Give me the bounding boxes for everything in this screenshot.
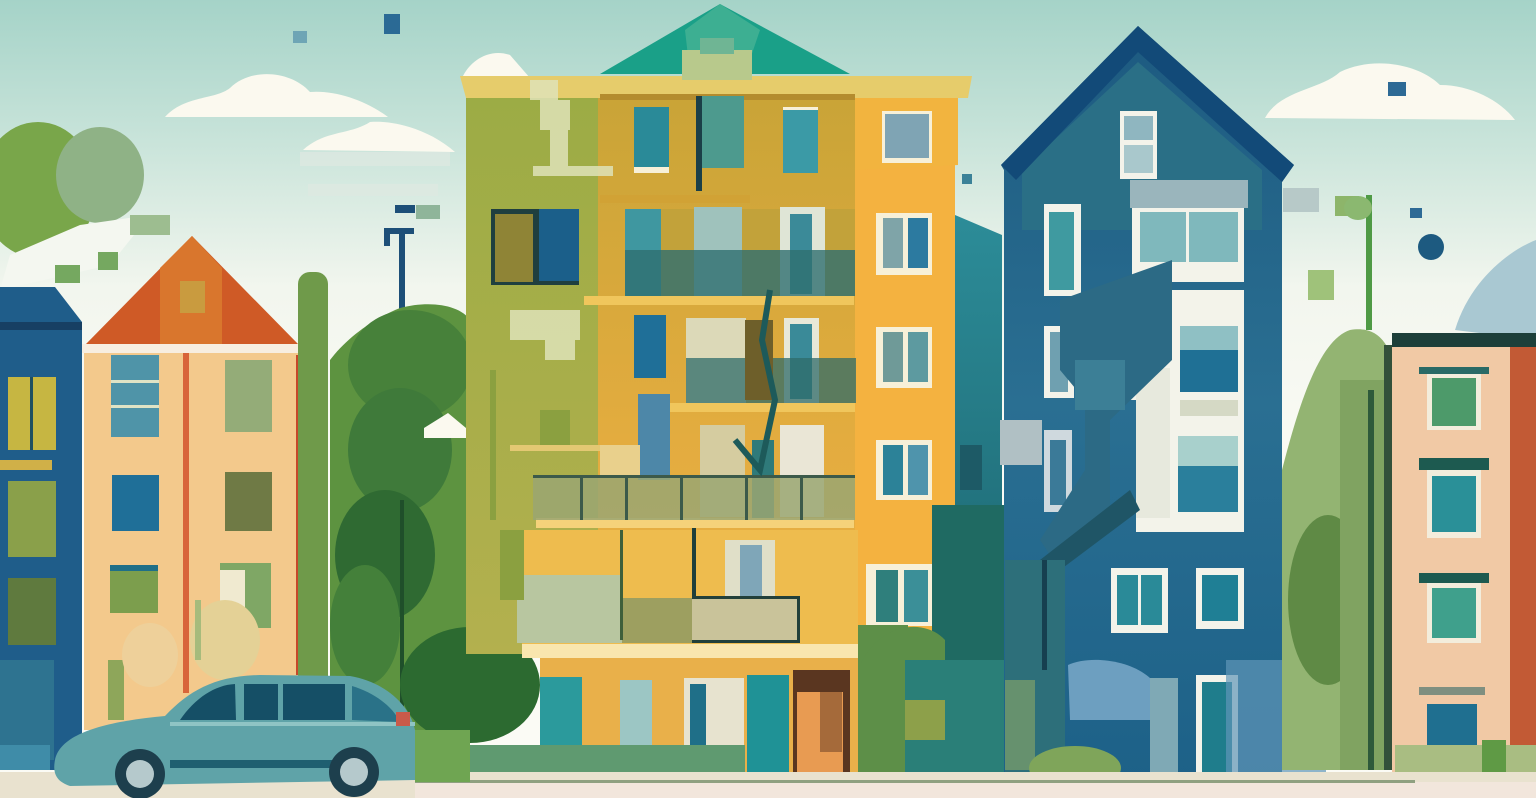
green roof ornament [682, 50, 752, 80]
ivy on olive wing [510, 80, 613, 360]
car wheels [115, 747, 379, 798]
faded cloud bands [300, 152, 450, 196]
central apartment [460, 38, 972, 784]
ground floor [540, 658, 860, 780]
right pink building [1392, 333, 1536, 785]
house yard plants [108, 600, 260, 720]
central trees [298, 272, 540, 743]
central apartment: roof peak [600, 4, 850, 74]
right bright wing [855, 165, 955, 635]
right wing windows [866, 213, 932, 626]
ledges [600, 195, 750, 203]
lower windows [1111, 568, 1168, 633]
left blue building [0, 287, 82, 770]
white mid block [1124, 290, 1244, 532]
roof slab [460, 76, 972, 98]
yellow core [598, 94, 858, 784]
house windows [111, 355, 159, 437]
floor 4 windows [638, 394, 670, 480]
teal mid-building [858, 215, 1005, 778]
orange roof house [82, 236, 310, 730]
lamp post [384, 205, 415, 313]
floor 3 windows [634, 315, 666, 378]
hedge [415, 730, 470, 782]
top windows [634, 107, 669, 173]
sky specks [293, 14, 1444, 300]
balcony floor 4 [533, 477, 855, 520]
door windows [1196, 675, 1238, 775]
attic window [1120, 111, 1157, 179]
olive wing [466, 94, 602, 654]
ground [0, 772, 1536, 798]
car [54, 675, 415, 798]
far right hill [1455, 240, 1536, 340]
balcony floor 5 [517, 575, 622, 643]
left background trees [0, 122, 170, 290]
clouds [165, 53, 1515, 152]
right trees [1282, 329, 1400, 770]
olive wing window [491, 209, 579, 285]
stair shading [1040, 260, 1172, 570]
vine and stair [735, 290, 775, 470]
big upper window [1132, 206, 1244, 282]
blue tall building [1000, 26, 1326, 790]
right plant mast [1344, 195, 1372, 330]
floor 2 windows [625, 209, 855, 296]
left tall windows [1044, 204, 1081, 296]
